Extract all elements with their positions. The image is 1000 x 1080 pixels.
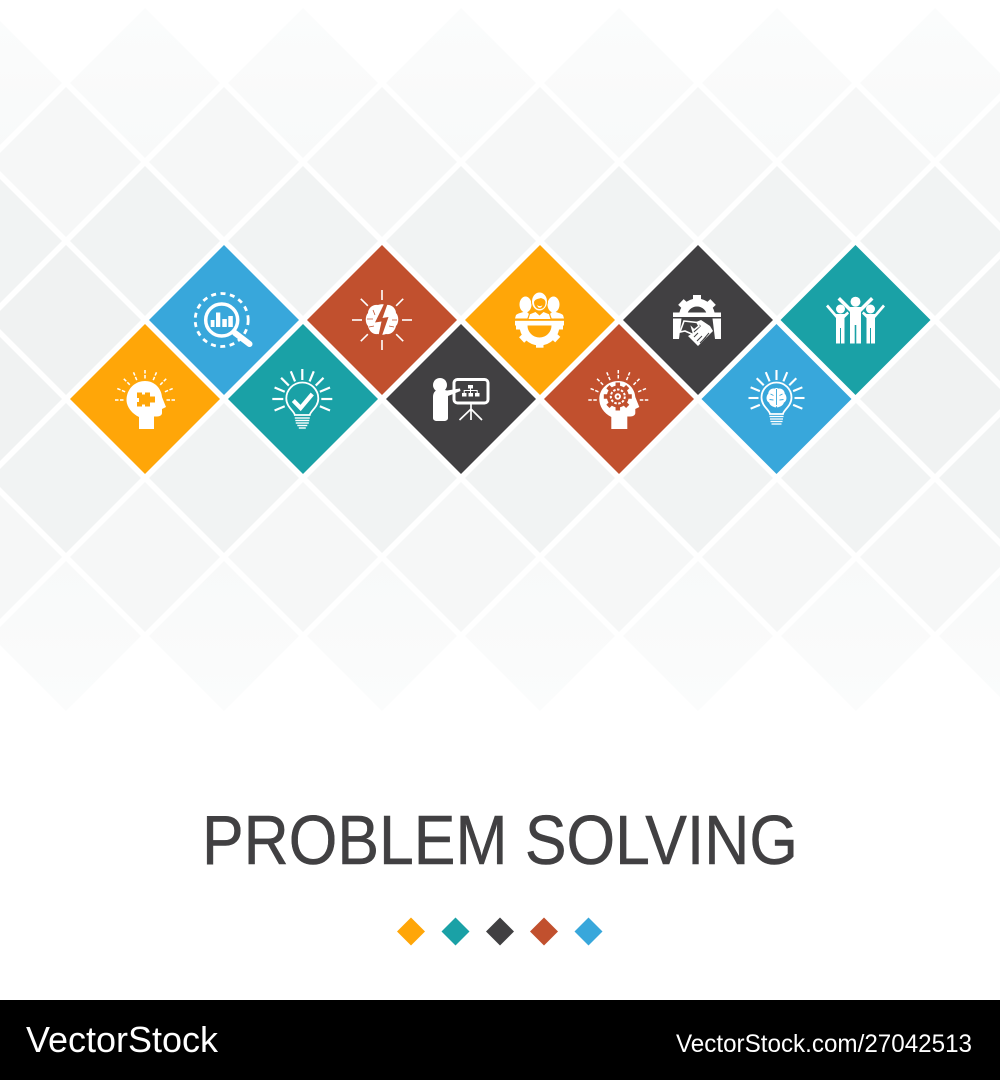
panel: dark diamond, presenter: [386, 324, 536, 474]
icon: head with puzzle piece: [115, 370, 175, 429]
icon: three people with raised arms: [826, 297, 885, 344]
panel: red diamond, brain with bolt: [307, 245, 457, 395]
footer bar: [0, 1000, 1000, 1080]
panel: teal diamond, cheering team: [780, 245, 930, 395]
panel: dark diamond, handshake and gear: [623, 245, 773, 395]
footer brand: VectorStock: [26, 1019, 219, 1060]
panel: orange diamond, head with puzzle: [70, 324, 220, 474]
icon: magnifier over bar chart: [195, 294, 250, 346]
background diamond lattice: [0, 8, 1000, 711]
icon: head with gear: [588, 370, 648, 429]
icon: handshake under gear: [673, 295, 721, 346]
footer image id: VectorStock.com/27042513: [676, 1030, 972, 1058]
icon: light bulb with brain: [748, 370, 804, 424]
panel: blue diamond, magnifier: [149, 245, 299, 395]
panel: blue diamond, bulb with brain: [702, 324, 852, 474]
title: PROBLEM SOLVING: [202, 801, 798, 879]
legend diamonds: [397, 918, 602, 946]
icon: presenter at chart board: [433, 378, 488, 421]
panel: teal diamond, bulb with check: [228, 324, 378, 474]
icon: light bulb with check mark: [272, 369, 332, 428]
icon: team above gear: [515, 292, 564, 348]
panel: orange diamond, team and gear: [465, 245, 615, 395]
panel: red diamond, head with gear: [544, 324, 694, 474]
icon: brain with lightning bolt: [352, 290, 412, 350]
